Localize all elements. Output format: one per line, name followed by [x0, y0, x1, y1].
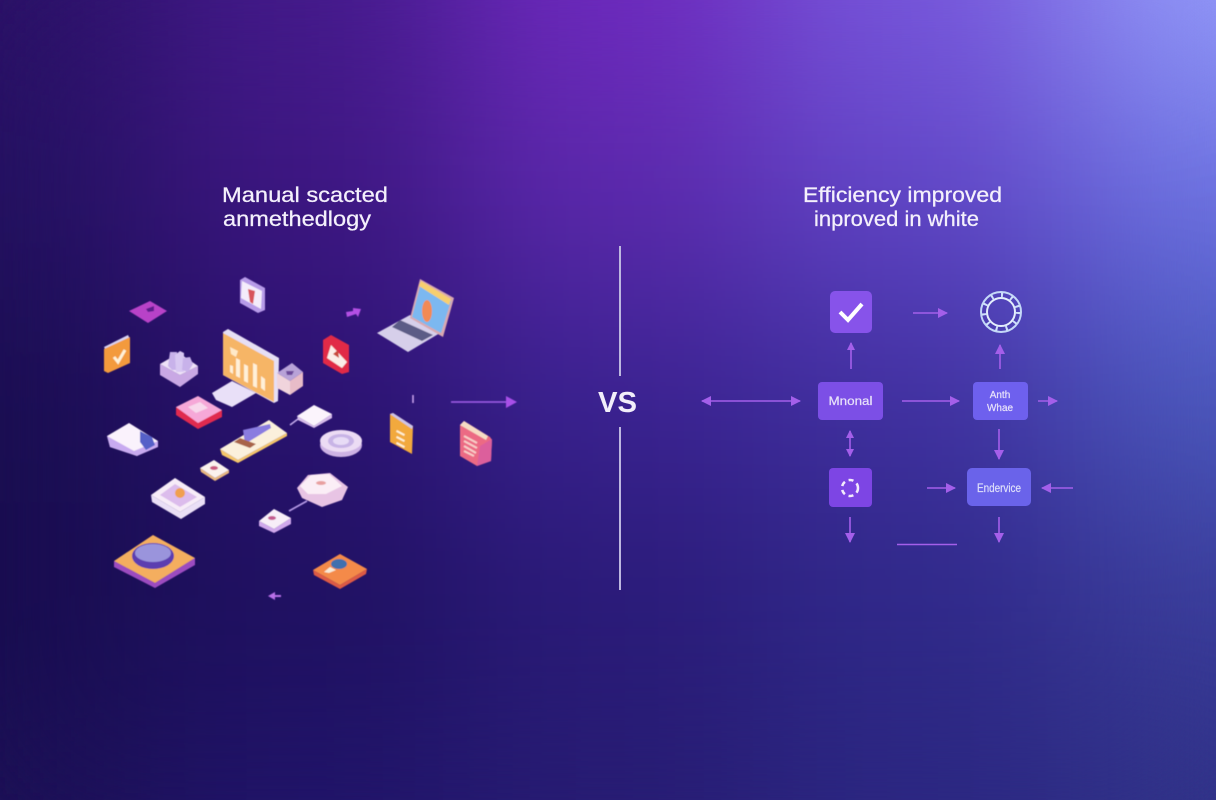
- icon: large orange platform: [114, 535, 195, 588]
- heading: right panel: Efficiency improved: [803, 184, 1002, 207]
- arrows: flow connectors: [702, 313, 1073, 544]
- node: Anth Whae: Whae: [987, 403, 1013, 414]
- icon: isometric city block: [160, 351, 198, 387]
- panel: manual methodology isometric icons: [104, 277, 517, 600]
- node: Anth Whae: Anth: [990, 390, 1010, 401]
- icon: red and pink box: [176, 396, 222, 429]
- heading: left panel: [222, 184, 388, 231]
- VS label: VS: [598, 387, 637, 419]
- arrow: hub connector: [289, 501, 307, 511]
- icon: small left arrow: [268, 592, 281, 600]
- heading: left panel: Manual scacted: [222, 184, 388, 207]
- icon: desktop monitor with chart: [212, 329, 279, 407]
- heading: left panel: anmethedlogy: [223, 208, 372, 231]
- icon: small connector device: [290, 405, 332, 428]
- icon: lilac map badge: [240, 277, 265, 313]
- icon: laptop: [377, 279, 454, 352]
- icon: orange magnifier tile: [313, 554, 367, 589]
- node: check box: [830, 291, 872, 333]
- node: Endervice: Endervice: [977, 483, 1021, 495]
- arrow: long right arrow to VS: [451, 396, 517, 408]
- node: Manual: Mnonal: [828, 396, 872, 408]
- icon: small chip: [259, 509, 291, 533]
- icon: octagon hub: [297, 473, 348, 507]
- node: Anth Whae: [973, 382, 1028, 420]
- icon: pink folder: [460, 421, 492, 466]
- icon: lilac card with shield: [151, 478, 205, 519]
- icon: red warning badge: [323, 335, 349, 374]
- heading: right panel: [803, 184, 1002, 231]
- node: Manual: [818, 382, 883, 420]
- icon: magenta folded tile: [129, 301, 167, 323]
- icon: orange check folder: [104, 335, 130, 373]
- icon: small cube: [277, 363, 303, 395]
- icon: round disc: [320, 430, 362, 457]
- icon: small plus marker: [412, 395, 414, 403]
- icon: arrow up right: [346, 308, 361, 317]
- icon: tablet document: [220, 420, 287, 463]
- node: Endervice: [967, 468, 1031, 506]
- icon: small diamond chip: [200, 460, 229, 481]
- node: gear cycle: [829, 468, 872, 507]
- icon: orange book: [390, 413, 413, 454]
- heading: right panel: inproved in white: [814, 208, 979, 231]
- icon: white device with blue corner: [107, 423, 158, 456]
- panel: efficient flow diagram: [702, 291, 1073, 544]
- node: chain ring: [981, 292, 1021, 332]
